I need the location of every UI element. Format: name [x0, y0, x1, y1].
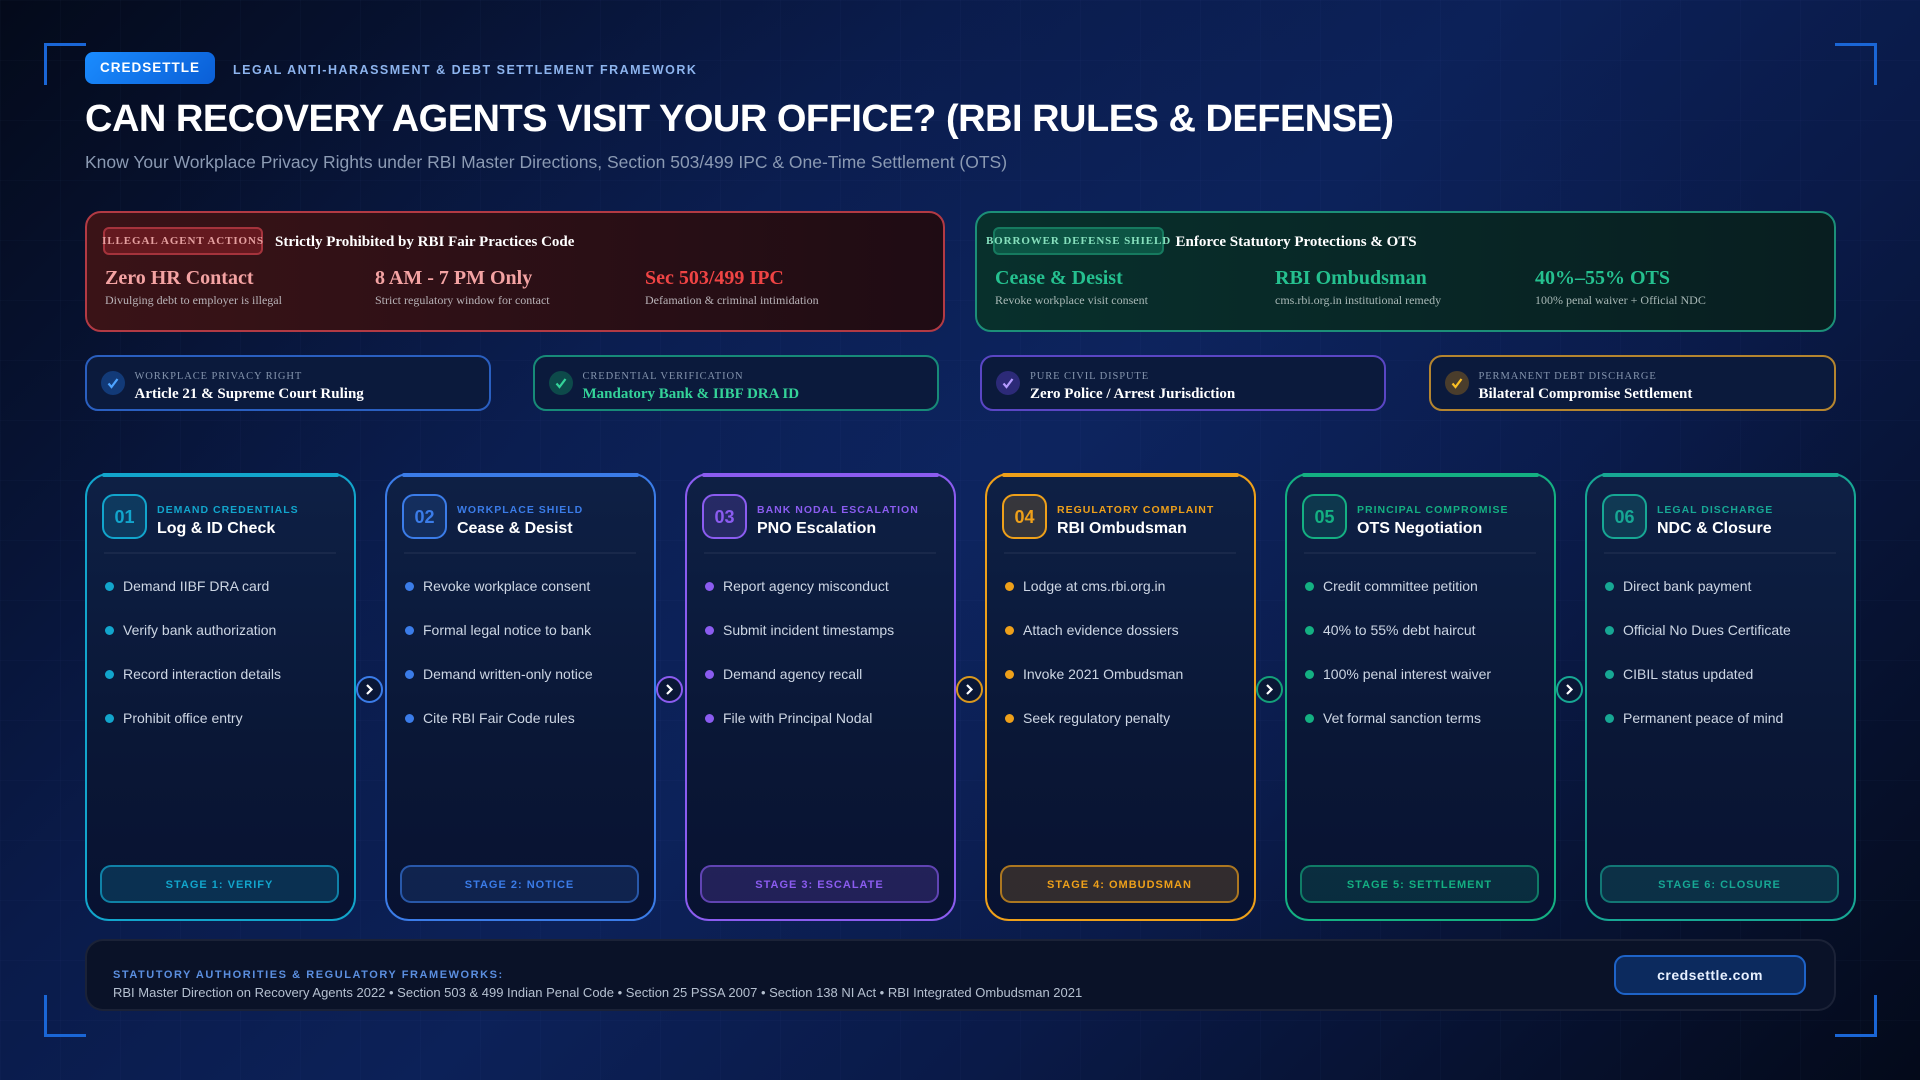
pill label: PERMANENT DEBT DISCHARGE — [1478, 371, 1657, 382]
icon: check — [1444, 371, 1468, 395]
stat note: Revoke workplace visit consent — [995, 293, 1148, 307]
stage label — [100, 865, 339, 903]
arrow 3 to 4 — [956, 676, 983, 703]
card: stage 04 — [984, 473, 1256, 921]
card: stage 05 — [1284, 473, 1556, 921]
list item: Submit incident timestamps — [723, 622, 894, 638]
pill value: Mandatory Bank & IIBF DRA ID — [582, 386, 799, 402]
arrow 1 to 2 — [356, 676, 383, 703]
card: stage 06 — [1584, 473, 1856, 921]
pill: workplace privacy right — [84, 355, 490, 411]
list item: Seek regulatory penalty — [1023, 710, 1170, 726]
arrow 4 to 5 — [1256, 676, 1283, 703]
corner bracket bottom left — [44, 995, 86, 1037]
list item: CIBIL status updated — [1623, 666, 1753, 682]
corner bracket bottom right — [1835, 995, 1877, 1037]
list item: Cite RBI Fair Code rules — [423, 710, 575, 726]
list item: Demand IIBF DRA card — [123, 578, 269, 594]
stat: cease and desist: Cease & Desist — [995, 267, 1123, 289]
step number: 05 — [1314, 507, 1335, 527]
stage label — [400, 865, 639, 903]
corner bracket top right — [1835, 43, 1877, 85]
stat note: Divulging debt to employer is illegal — [105, 293, 282, 307]
icon: check — [548, 371, 572, 395]
stat: zero HR contact: Zero HR Contact — [105, 267, 254, 289]
tag: borrower defense shield — [993, 227, 1164, 255]
step title: NDC & Closure — [1657, 520, 1772, 537]
corner bracket top left — [44, 43, 86, 85]
list item: Prohibit office entry — [123, 710, 243, 726]
step eyebrow: LEGAL DISCHARGE — [1657, 504, 1773, 516]
step number: 03 — [714, 507, 735, 527]
step number — [702, 494, 747, 539]
arrow 2 to 3 — [656, 676, 683, 703]
list item: Report agency misconduct — [723, 578, 889, 594]
stage label: STAGE 5: SETTLEMENT — [1347, 879, 1492, 891]
step eyebrow: DEMAND CREDENTIALS — [157, 504, 299, 516]
pill label: CREDENTIAL VERIFICATION — [582, 371, 743, 382]
list item: Direct bank payment — [1623, 578, 1751, 594]
step title: Cease & Desist — [457, 520, 573, 537]
pill: permanent debt discharge — [1428, 355, 1836, 411]
stage label — [1600, 865, 1839, 903]
step eyebrow: PRINCIPAL COMPROMISE — [1357, 504, 1508, 516]
list item: Lodge at cms.rbi.org.in — [1023, 578, 1165, 594]
step number: 04 — [1014, 507, 1035, 527]
arrow 5 to 6 — [1556, 676, 1583, 703]
tag: illegal agent actions: ILLEGAL AGENT ACTIONS — [102, 234, 264, 246]
panel: borrower defense shield — [974, 211, 1836, 332]
list item: Verify bank authorization — [123, 622, 276, 638]
pill value: Bilateral Compromise Settlement — [1478, 386, 1692, 402]
subtitle: Know Your Workplace Privacy Rights under RBI Master Directions, Section 503/499 IPC & One-Time Settlement (OTS) — [85, 152, 1007, 172]
stat: IPC sections: Sec 503/499 IPC — [645, 267, 784, 289]
step number — [102, 494, 147, 539]
stage label — [700, 865, 939, 903]
stage label: STAGE 6: CLOSURE — [1658, 879, 1781, 891]
stat note: 100% penal waiver + Official NDC — [1535, 293, 1706, 307]
pill: pure civil dispute — [980, 355, 1386, 411]
list item: 40% to 55% debt haircut — [1323, 622, 1476, 638]
panel heading: Strictly Prohibited by RBI Fair Practices Code — [275, 234, 574, 250]
eyebrow heading: LEGAL ANTI-HARASSMENT & DEBT SETTLEMENT FRAMEWORK — [233, 63, 697, 77]
pill value: Article 21 & Supreme Court Ruling — [134, 386, 364, 402]
tag: illegal agent actions — [103, 227, 263, 255]
card: stage 01 — [84, 473, 356, 921]
list item: Official No Dues Certificate — [1623, 622, 1791, 638]
step number: 01 — [114, 507, 135, 527]
tag: borrower defense shield: BORROWER DEFENSE SHIELD — [986, 234, 1171, 246]
stage label: STAGE 4: OMBUDSMAN — [1047, 879, 1192, 891]
brand badge: CREDSETTLE — [100, 60, 200, 75]
title: CAN RECOVERY AGENTS VISIT YOUR OFFICE? (RBI RULES & DEFENSE) — [85, 98, 1394, 140]
step number: 06 — [1614, 507, 1635, 527]
stage label: STAGE 2: NOTICE — [465, 879, 574, 891]
list item: Vet formal sanction terms — [1323, 710, 1481, 726]
stat: OTS range: 40%–55% OTS — [1535, 267, 1670, 289]
panel heading: Enforce Statutory Protections & OTS — [1176, 234, 1417, 250]
list item: Formal legal notice to bank — [423, 622, 591, 638]
stage label: STAGE 3: ESCALATE — [755, 879, 884, 891]
pill value: Zero Police / Arrest Jurisdiction — [1030, 386, 1235, 402]
step number — [1602, 494, 1647, 539]
list item: 100% penal interest waiver — [1323, 666, 1491, 682]
card: stage 02 — [384, 473, 656, 921]
step eyebrow: BANK NODAL ESCALATION — [757, 504, 919, 516]
stat: RBI ombudsman: RBI Ombudsman — [1275, 267, 1427, 289]
list item: Demand agency recall — [723, 666, 862, 682]
footer heading: STATUTORY AUTHORITIES & REGULATORY FRAMEWORKS: — [113, 969, 504, 981]
stage label — [1300, 865, 1539, 903]
website button — [1614, 955, 1806, 995]
list item: Attach evidence dossiers — [1023, 622, 1179, 638]
step title: Log & ID Check — [157, 520, 275, 537]
stage label — [1000, 865, 1239, 903]
list item: File with Principal Nodal — [723, 710, 872, 726]
footer references: RBI Master Direction on Recovery Agents 2022 • Section 503 & 499 Indian Penal Code • Section 25 PSSA 2007 • Section 138 NI Act • RBI Integrated Ombudsman 2021 — [113, 985, 1082, 1000]
step number: 02 — [414, 507, 435, 527]
list item: Record interaction details — [123, 666, 281, 682]
stat: contact hours: 8 AM - 7 PM Only — [375, 267, 532, 289]
list item: Revoke workplace consent — [423, 578, 590, 594]
stat note: Defamation & criminal intimidation — [645, 293, 819, 307]
stat note: cms.rbi.org.in institutional remedy — [1275, 293, 1441, 307]
stage label: STAGE 1: VERIFY — [166, 879, 273, 891]
pill label: PURE CIVIL DISPUTE — [1030, 371, 1149, 382]
step number — [1302, 494, 1347, 539]
list item: Permanent peace of mind — [1623, 710, 1783, 726]
step eyebrow: REGULATORY COMPLAINT — [1057, 504, 1214, 516]
pill: credential verification — [532, 355, 938, 411]
icon: check — [996, 371, 1020, 395]
list item: Invoke 2021 Ombudsman — [1023, 666, 1183, 682]
step title: OTS Negotiation — [1357, 520, 1482, 537]
card: stage 03 — [684, 473, 956, 921]
list item: Credit committee petition — [1323, 578, 1478, 594]
icon: check — [100, 371, 124, 395]
step number — [402, 494, 447, 539]
footer panel — [84, 939, 1836, 1011]
step title: PNO Escalation — [757, 520, 876, 537]
list item: Demand written-only notice — [423, 666, 593, 682]
stat note: Strict regulatory window for contact — [375, 293, 550, 307]
step title: RBI Ombudsman — [1057, 520, 1187, 537]
pill label: WORKPLACE PRIVACY RIGHT — [134, 371, 302, 382]
step eyebrow: WORKPLACE SHIELD — [457, 504, 583, 516]
website button: credsettle.com — [1657, 967, 1763, 983]
panel: illegal agent actions — [84, 211, 945, 332]
brand badge — [85, 52, 215, 84]
step number — [1002, 494, 1047, 539]
